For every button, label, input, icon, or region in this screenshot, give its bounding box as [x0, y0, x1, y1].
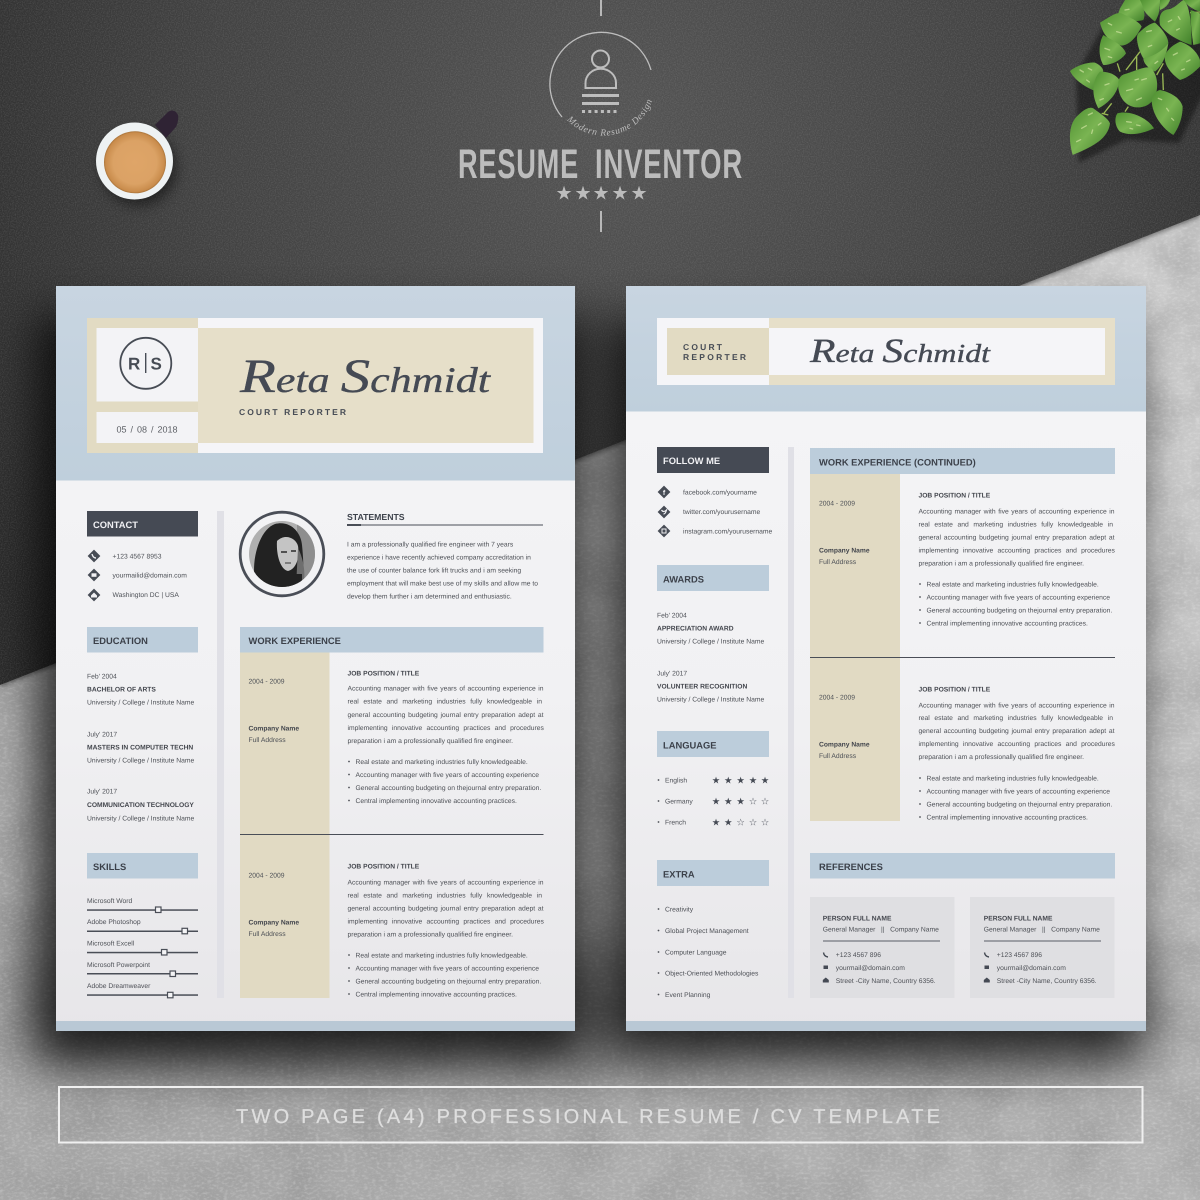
statements section: STATEMENTS [347, 512, 405, 522]
job entry one: general accounting budgeting journal entry preparation adept at [348, 712, 544, 719]
statements section: experience i have recently achieved company accreditation in [347, 554, 531, 561]
work experience section page one [240, 627, 545, 998]
job entry two: JOB POSITION / TITLE [348, 864, 420, 870]
awards section: University / College / Institute Name [657, 638, 765, 645]
language section: Germany [665, 798, 693, 805]
logo: emblem with circle and person icon [549, 32, 652, 136]
logo: five stars: ★★★★★ [555, 182, 648, 204]
contact section: Washington DC | USA [112, 592, 179, 599]
reference card two: General Manager || Company Name [984, 926, 1100, 933]
education section: Feb' 2004 [87, 673, 117, 680]
logo: brand name: INVENTOR [595, 140, 743, 187]
job entry four: General accounting budgeting on thejournal entry preparation. [926, 801, 1112, 808]
job entry three: Central implementing innovative accounting practices. [926, 620, 1088, 627]
job entry three: general accounting budgeting journal entry preparation adept at [918, 534, 1115, 541]
awards section: July' 2017 [657, 670, 687, 677]
icon: facebook: f [663, 489, 666, 497]
monogram circle: S [150, 354, 162, 374]
job entry two: implementing innovative accounting practices and procedures [348, 918, 545, 925]
job entry four: Accounting manager with five years of accounting experience [926, 788, 1110, 795]
job entry three: implementing innovative accounting practices and procedures [918, 547, 1116, 554]
icon: instagram [658, 525, 670, 537]
icon: phone [88, 550, 100, 562]
section divider column page two [788, 447, 794, 998]
page two bottom band [626, 1021, 1146, 1031]
job entry one: Company Name [248, 726, 299, 732]
job entry four [819, 686, 1116, 821]
awards section: APPRECIATION AWARD [657, 625, 734, 632]
follow me section: twitter.com/yourusername [683, 509, 761, 516]
reference card one: PERSON FULL NAME [823, 915, 892, 922]
skills section: Adobe Dreamweaver [87, 983, 151, 990]
job title: COURT REPORTER [239, 407, 346, 417]
header block page one [87, 318, 543, 453]
job entry two: general accounting budgeting journal entry preparation adept at [348, 905, 544, 912]
skills section: Microsoft Powerpoint [87, 962, 150, 969]
panel: resume page one [56, 286, 575, 1031]
extra section [657, 860, 769, 999]
contact section: yourmailid@domain.com [112, 572, 187, 580]
extra section: Object-Oriented Methodologies [665, 970, 759, 977]
follow me section: facebook.com/yourname [683, 489, 757, 496]
education section: University / College / Institute Name [87, 699, 195, 706]
job entry two: Company Name [248, 920, 299, 926]
work experience section page one: WORK EXPERIENCE [248, 636, 341, 646]
skills section [87, 853, 198, 998]
statements section [347, 512, 543, 600]
education section [87, 627, 198, 822]
icon: coffee cup [96, 110, 178, 206]
extra section: Computer Language [665, 949, 727, 956]
references section [810, 853, 1115, 998]
awards section: Feb' 2004 [657, 612, 687, 619]
reference card two [970, 897, 1114, 998]
job entry four: general accounting budgeting journal entry preparation adept at [918, 728, 1115, 735]
monogram circle: R [128, 354, 140, 374]
bottom banner: TWO PAGE (A4) PROFESSIONAL RESUME / CV TEMPLATE [236, 1106, 940, 1128]
skills section: SKILLS [93, 862, 126, 872]
education section: BACHELOR OF ARTS [87, 686, 156, 693]
statements section: I am a professionally qualified fire engineer with 7 years [347, 541, 514, 548]
page one bottom band [56, 1021, 575, 1031]
job entry four: JOB POSITION / TITLE [918, 686, 991, 693]
language section: ★★★★★ [712, 775, 769, 786]
awards section: VOLUNTEER RECOGNITION [657, 683, 747, 690]
panel: resume page two [626, 286, 1146, 1031]
language section: LANGUAGE [663, 740, 716, 750]
logo: brand name: RESUME [458, 140, 579, 187]
reference card two: Street -City Name, Country 6356. [997, 978, 1097, 985]
job entry two: Full Address [248, 931, 286, 938]
job entry two: General accounting budgeting on thejournal entry preparation. [356, 978, 541, 985]
extra section: EXTRA [663, 870, 695, 880]
bottom banner [59, 1087, 1142, 1142]
job title [683, 342, 746, 362]
job entry two [248, 864, 545, 998]
section divider column page one [217, 511, 224, 998]
reference card one: +123 4567 896 [836, 952, 881, 959]
job entry two: 2004 - 2009 [248, 872, 285, 879]
logo: brand name [458, 140, 743, 187]
reference card one [810, 897, 954, 998]
job entry three: preparation i am a professionally qualified fire engineer. [918, 560, 1084, 567]
signature name: Reta Schmidt [239, 350, 491, 403]
job entry one: JOB POSITION / TITLE [348, 670, 420, 678]
language section: French [665, 819, 686, 826]
job entry four: Full Address [819, 753, 857, 760]
job entry three: Accounting manager with five years of accounting experience in [918, 508, 1115, 515]
job entry two: Real estate and marketing industries fully knowledgeable. [356, 952, 528, 959]
job entry three: Real estate and marketing industries fully knowledgeable. [926, 581, 1099, 588]
education section: July' 2017 [87, 731, 117, 738]
job entry three: Company Name [819, 548, 870, 554]
monogram circle [120, 338, 171, 389]
job entry three: General accounting budgeting on thejournal entry preparation. [926, 607, 1112, 614]
job entry three: Full Address [819, 559, 857, 566]
job entry three: 2004 - 2009 [819, 500, 855, 507]
contact section [87, 511, 198, 601]
statements section: the use of counter balance fork lift trucks and i am seeking [347, 567, 521, 574]
statements section: employment that will make best use of my skills and allow me to [347, 580, 538, 587]
job entry one: Full Address [248, 737, 286, 744]
reference card two: PERSON FULL NAME [984, 915, 1053, 922]
job entry two: Accounting manager with five years of accounting experience [356, 965, 539, 972]
icon: green plant leaves [1070, 0, 1200, 163]
language section: ★★☆☆☆ [712, 817, 769, 828]
job entry one: Accounting manager with five years of accounting experience in [348, 685, 544, 692]
job entry one: 2004 - 2009 [248, 678, 285, 685]
job entry four: 2004 - 2009 [819, 694, 855, 701]
references section: REFERENCES [819, 862, 883, 872]
profile photo [240, 512, 324, 596]
job entry two: preparation i am a professionally qualified fire engineer. [348, 931, 513, 938]
job entry four: Company Name [819, 742, 870, 748]
icon: twitter [658, 506, 670, 518]
job entry three [819, 492, 1116, 627]
logo: emblem with circle and person icon: Modern Resume Design [566, 100, 652, 136]
reference card one: General Manager || Company Name [823, 926, 939, 933]
follow me section: instagram.com/yourusername [683, 528, 773, 536]
skills section: Microsoft Excell [87, 940, 135, 948]
statements section: develop them further i am determined and enthusiastic. [347, 593, 512, 600]
job entry four: Central implementing innovative accounting practices. [926, 814, 1088, 821]
header block page two [657, 318, 1115, 385]
job title: REPORTER [683, 352, 746, 362]
icon: mail [88, 569, 100, 581]
job entry four: preparation i am a professionally qualified fire engineer. [918, 754, 1084, 761]
awards section: AWARDS [663, 574, 704, 584]
job entry one: implementing innovative accounting practices and procedures [348, 725, 545, 732]
skills section: Adobe Photoshop [87, 919, 141, 926]
job entry four: Accounting manager with five years of accounting experience in [918, 702, 1115, 709]
extra section: Creativity [665, 906, 694, 913]
reference card two: +123 4567 896 [997, 952, 1042, 959]
page one top band [56, 286, 575, 480]
logo: bottom divider line [600, 211, 602, 232]
education section: July' 2017 [87, 788, 117, 795]
language section [657, 731, 769, 828]
job entry one: Real estate and marketing industries fully knowledgeable. [356, 759, 528, 766]
work experience continued section [810, 448, 1116, 821]
education section: COMMUNICATION TECHNOLOGY [87, 802, 194, 809]
job entry one: preparation i am a professionally qualified fire engineer. [348, 738, 513, 745]
contact section: CONTACT [93, 520, 138, 530]
job entry one: real estate and marketing industries fully knowledgeable in [348, 698, 542, 705]
icon: home [88, 589, 100, 601]
job title: COURT [683, 342, 723, 352]
skills section: Microsoft Word [87, 898, 133, 905]
job entry three: real estate and marketing industries fully knowledgeable in [918, 521, 1113, 528]
extra section: Global Project Management [665, 928, 749, 935]
follow me section: FOLLOW ME [663, 456, 720, 466]
job entry four: real estate and marketing industries fully knowledgeable in [918, 715, 1113, 722]
contact section: +123 4567 8953 [112, 553, 162, 560]
job entry two: Accounting manager with five years of accounting experience in [348, 879, 544, 886]
language section: ★★★☆☆ [712, 796, 769, 807]
job entry three: Accounting manager with five years of accounting experience [926, 594, 1110, 601]
follow me section [657, 447, 773, 537]
reference card one: yourmail@domain.com [836, 965, 905, 972]
job entry one [248, 670, 545, 805]
job entry four: implementing innovative accounting practices and procedures [918, 741, 1116, 748]
job entry one: Accounting manager with five years of accounting experience [356, 772, 539, 779]
extra section: Event Planning [665, 992, 711, 999]
job entry two: Central implementing innovative accounting practices. [356, 991, 517, 998]
logo: top divider line [600, 0, 602, 16]
awards section: University / College / Institute Name [657, 696, 765, 703]
date: 05 / 08 / 2018 [116, 424, 178, 434]
job entry one: General accounting budgeting on thejournal entry preparation. [356, 785, 541, 792]
job entry one: Central implementing innovative accounting practices. [356, 798, 517, 805]
work experience continued section: WORK EXPERIENCE (CONTINUED) [819, 458, 976, 468]
education section: MASTERS IN COMPUTER TECHN [87, 744, 193, 751]
reference card two: yourmail@domain.com [997, 965, 1066, 972]
reference card one: Street -City Name, Country 6356. [836, 978, 936, 985]
job entry three: JOB POSITION / TITLE [918, 492, 991, 499]
awards section [657, 565, 769, 703]
job entry four: Real estate and marketing industries fully knowledgeable. [926, 775, 1099, 782]
page two top band [626, 286, 1146, 412]
education section: EDUCATION [93, 636, 148, 646]
page shadows [30, 315, 1155, 1065]
job entry two: real estate and marketing industries fully knowledgeable in [348, 892, 542, 899]
signature name: Reta Schmidt [809, 333, 991, 370]
education section: University / College / Institute Name [87, 757, 195, 764]
education section: University / College / Institute Name [87, 815, 195, 822]
language section: English [665, 777, 687, 784]
